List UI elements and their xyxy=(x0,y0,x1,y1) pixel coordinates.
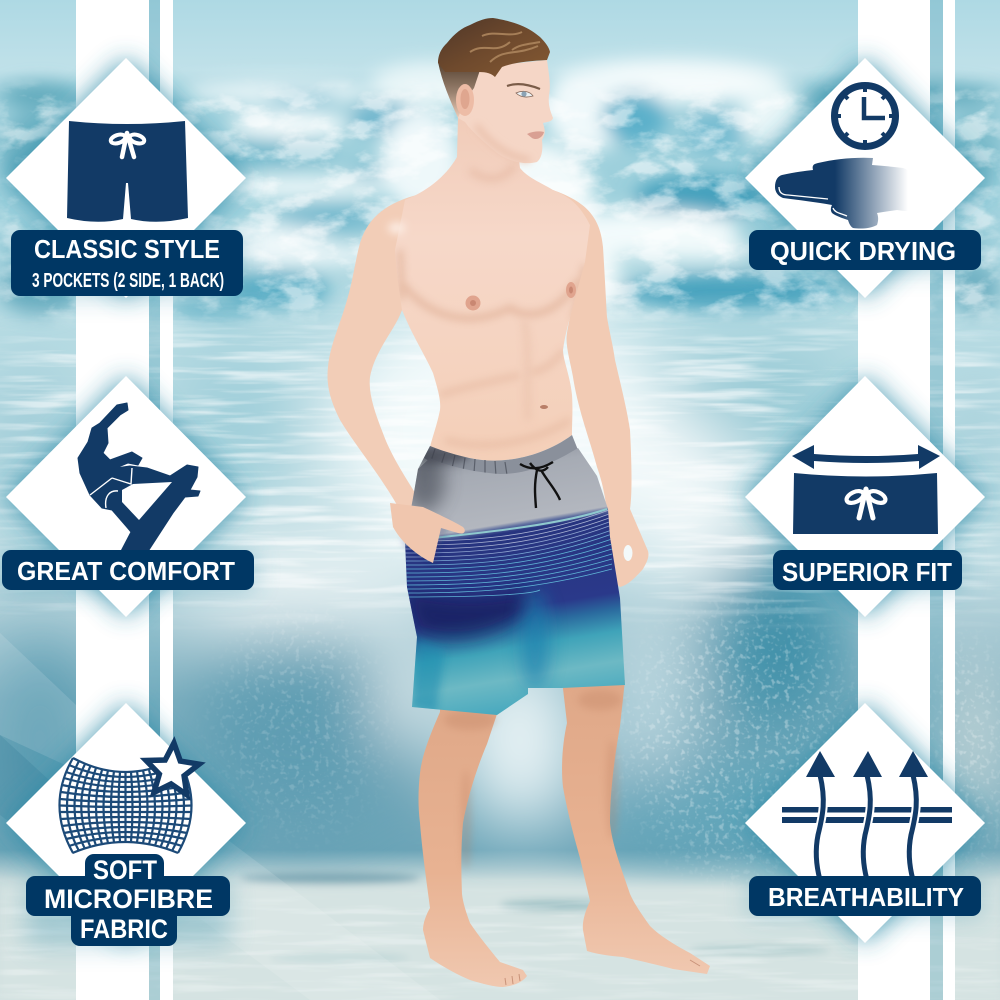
diamond halo xyxy=(745,376,985,617)
label xyxy=(26,854,230,946)
navel xyxy=(540,405,548,409)
label: SUPERIOR FIT xyxy=(782,557,952,587)
right arm and hand xyxy=(553,190,648,587)
diamond xyxy=(6,376,246,617)
label: BREATHABILITY xyxy=(768,882,964,912)
left leg xyxy=(418,700,527,987)
label: QUICK DRYING xyxy=(770,236,956,266)
label xyxy=(2,550,254,590)
waistband elastic xyxy=(424,435,578,475)
waistband pleats xyxy=(431,449,507,476)
jaw shadow xyxy=(476,125,530,160)
toes xyxy=(505,960,700,985)
icon: surfer xyxy=(78,403,200,553)
left vertical white stripes xyxy=(76,0,173,1000)
diamond xyxy=(6,58,246,298)
hair xyxy=(438,18,550,77)
diamond halo xyxy=(745,58,985,298)
label: MICROFIBRE xyxy=(44,884,213,914)
label xyxy=(11,230,243,296)
left arm xyxy=(328,194,423,507)
icon: shorts xyxy=(67,121,188,222)
label xyxy=(749,876,981,916)
icon: width arrow xyxy=(792,445,940,469)
eyebrow xyxy=(507,84,540,89)
icon: drying puddle xyxy=(775,158,917,229)
panel: great comfort xyxy=(2,376,254,617)
left nipple xyxy=(466,296,480,310)
icon: mesh fabric xyxy=(60,758,192,853)
label: SOFT xyxy=(93,855,157,885)
icon: star xyxy=(144,741,200,796)
right nipple xyxy=(566,282,576,298)
label: 3 POCKETS (2 SIDE, 1 BACK) xyxy=(32,270,224,292)
icon: waistband xyxy=(793,473,938,534)
diamond xyxy=(745,703,985,943)
pocket shadow xyxy=(404,522,445,562)
panel: soft microfibre fabric xyxy=(6,703,246,946)
mouth xyxy=(527,131,544,139)
diamond halo xyxy=(2,376,254,617)
gap between fingers xyxy=(624,545,632,561)
torso xyxy=(395,118,590,461)
shorts shading and stripes xyxy=(404,446,612,712)
diamond halo xyxy=(745,703,985,943)
iris xyxy=(521,91,527,97)
shorts xyxy=(405,448,625,715)
hair highlights xyxy=(470,32,540,62)
eye xyxy=(516,91,533,97)
model in swim shorts xyxy=(328,18,710,987)
hair fade xyxy=(438,62,480,118)
shoulder highlight xyxy=(388,222,406,234)
icon: breathable layers with arrows xyxy=(782,751,952,880)
label: FABRIC xyxy=(80,914,168,944)
diamond halo xyxy=(6,703,246,946)
left hand in pocket xyxy=(390,503,465,563)
label xyxy=(749,230,981,270)
diamond xyxy=(745,58,985,298)
right vertical white stripes xyxy=(858,0,955,1000)
panel: quick drying xyxy=(745,58,985,298)
head and face xyxy=(457,60,553,163)
label: GREAT COMFORT xyxy=(17,556,235,586)
ear xyxy=(456,84,474,116)
panel: breathability xyxy=(745,703,985,943)
panel: superior fit xyxy=(745,376,985,617)
panel: classic style xyxy=(6,58,246,298)
right leg xyxy=(562,680,710,974)
drawstring xyxy=(520,462,560,508)
icon: clock xyxy=(834,86,896,146)
diamond xyxy=(6,703,246,943)
torso shading xyxy=(400,165,585,445)
diamond xyxy=(745,376,985,617)
label: CLASSIC STYLE xyxy=(34,234,220,264)
leg shading xyxy=(444,690,622,870)
diamond halo xyxy=(6,58,246,298)
